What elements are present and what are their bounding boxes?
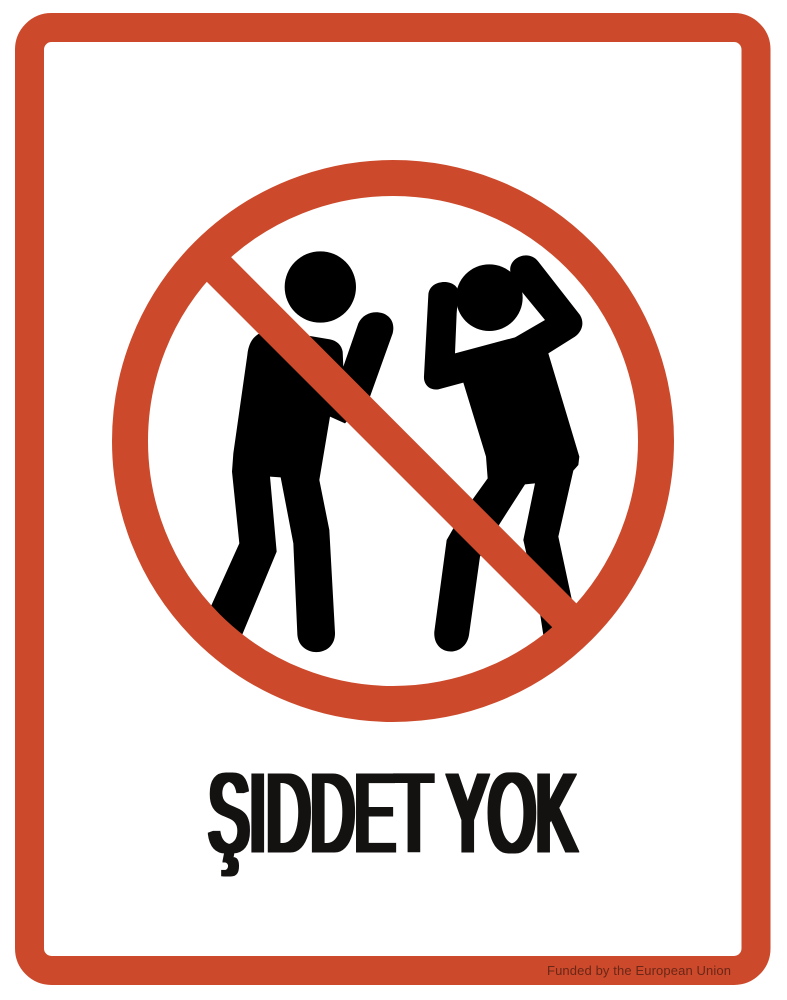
prohibition diagonal bar <box>197 248 585 637</box>
footer credit: Funded by the European Union <box>547 963 731 978</box>
figure: victim on the right, shielding head <box>424 255 582 652</box>
figures: attacker and victim <box>210 251 582 652</box>
figure: attacker on the left <box>210 251 393 652</box>
pictogram: two fighting figures under prohibition sign <box>130 178 656 704</box>
prohibition ring <box>130 178 656 704</box>
